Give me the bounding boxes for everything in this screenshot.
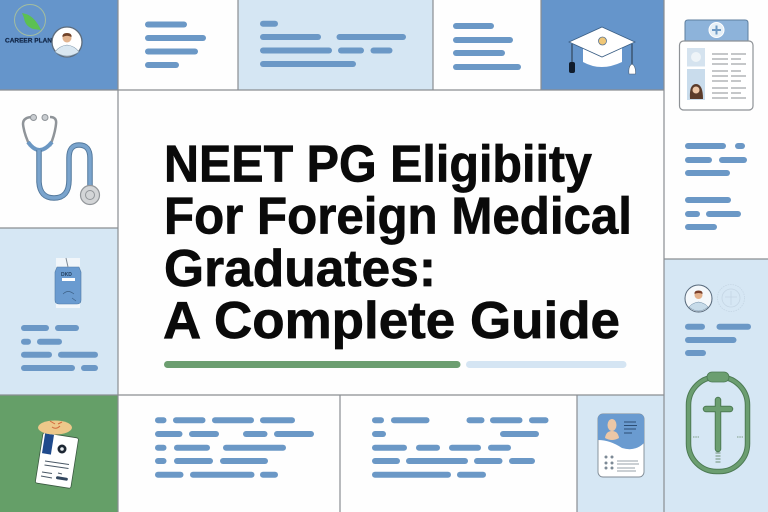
icon: graduation cap	[569, 27, 636, 74]
icon: medical tag	[55, 258, 81, 308]
icon: medical record card	[680, 20, 753, 110]
icon: green medical frame with cross	[688, 372, 748, 472]
icon: doctor avatar	[685, 285, 712, 312]
title underline: light blue	[466, 361, 626, 368]
icon: faint seal	[718, 284, 744, 312]
text placeholder: right lower column	[685, 324, 751, 356]
text placeholder: bottom cell 1	[155, 417, 314, 478]
text placeholder: left column	[21, 325, 98, 371]
text placeholder: bottom cell 2	[372, 417, 548, 478]
title underline: green	[164, 361, 460, 368]
text placeholder: right column	[685, 143, 747, 230]
logo: Career Plan: CAREER PLAN	[5, 38, 52, 44]
icon: stethoscope	[23, 114, 100, 204]
title: NEET PG Eligibiity	[164, 136, 592, 194]
title: A Complete Guide	[163, 292, 620, 350]
icon: profile card	[598, 414, 644, 477]
logo: Career Plan	[5, 4, 82, 57]
text placeholder: top cell 1	[145, 22, 206, 68]
icon: medical tag: DKD	[61, 272, 72, 278]
title	[163, 136, 632, 350]
text placeholder: top cell 3	[453, 23, 521, 70]
icon: ID badge	[35, 420, 79, 488]
title: For Foreign Medical	[164, 188, 632, 246]
text placeholder: top cell 2	[260, 21, 406, 67]
title: Graduates:	[164, 240, 436, 298]
